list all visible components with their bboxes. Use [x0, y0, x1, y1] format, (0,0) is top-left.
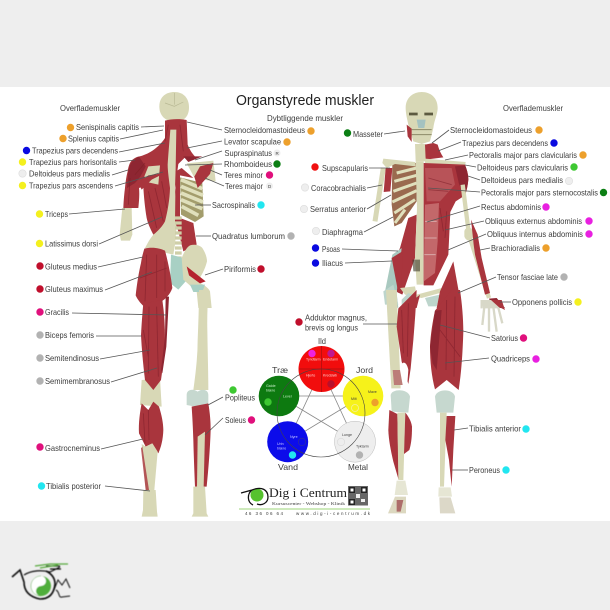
chart: five elements diagram — [259, 336, 383, 472]
element: Træ circle: blære — [266, 388, 275, 392]
label: Diaphragma: Diaphragma — [322, 227, 363, 237]
label: Masseter — [344, 129, 405, 139]
label: Soleus — [205, 415, 255, 435]
label: Triceps — [36, 209, 125, 219]
label: Trapezius pars ascendens — [19, 172, 163, 191]
panel: poster — [0, 87, 610, 521]
element: Metal circle — [334, 421, 376, 462]
element: Metal circle: Lunge — [342, 433, 352, 437]
element: Jord circle — [343, 376, 383, 416]
label: Sternocleidomastoideus back: Sternocleidomastoideus — [224, 125, 305, 135]
label: Gluteus maximus: Gluteus maximus — [45, 284, 103, 294]
label: Pectoralis major pars sternocostalis — [428, 188, 607, 198]
star lines — [279, 369, 363, 442]
label: Supscapularis: Supscapularis — [322, 163, 368, 173]
element: Metal circle: Tyktarm — [356, 444, 369, 448]
label: Semimembranosus — [36, 368, 157, 386]
label: Peroneus: Peroneus — [469, 465, 500, 475]
element: Vand circle: blære — [277, 446, 286, 450]
label: Tibialis posterior: Tibialis posterior — [46, 481, 101, 491]
subtitle: deep muscles: Dybtliggende muskler — [267, 113, 343, 123]
label: Quadriceps: Quadriceps — [491, 354, 530, 364]
logo phone: 46 36 06 64 — [245, 511, 283, 516]
label: Obliquus externus abdominis: Obliquus externus abdominis — [485, 216, 582, 226]
label: Masseter: Masseter — [353, 129, 383, 139]
logo website: www.dig-i-centrum.dk — [296, 511, 371, 516]
label: Rectus abdominis — [427, 202, 550, 222]
element: Træ circle — [259, 376, 299, 416]
label: Satorius — [440, 325, 527, 343]
label: Metal: Metal — [348, 462, 368, 472]
heading: surface muscles right: Overflademuskler — [503, 103, 563, 113]
label: Sternocleidomastoideus front: Sternocleidomastoideus — [450, 125, 532, 135]
element: Træ circle: Lever — [283, 394, 293, 398]
figure: back view legs — [139, 290, 211, 517]
figure: front view upper body — [375, 92, 505, 308]
label: Latissimus dorsi — [36, 217, 162, 249]
label: Tensor fasciae late: Tensor fasciae late — [497, 272, 558, 282]
label: Trapezius pars decendens: Trapezius pars decendens — [32, 146, 118, 156]
element: Ild circle: Kredsløb — [323, 374, 337, 378]
label: Biceps femoris — [36, 330, 142, 340]
label: Adduktor magnus: brevis og longus — [305, 322, 358, 332]
label: Peroneus — [452, 465, 510, 475]
label: Obliquus externus abdominis — [445, 216, 593, 230]
logo: Dig i Centrum — [239, 485, 371, 516]
label: Supraspinatus: Supraspinatus — [224, 148, 272, 158]
label: Teres major: D — [268, 184, 272, 189]
logo name: Dig i Centrum — [269, 485, 347, 500]
label: Senispinalis capitis: Senispinalis capitis — [76, 122, 139, 132]
label: Deltoideus pars medialis front: Deltoideus pars medialis — [481, 175, 563, 185]
label: Gluteus medius — [36, 257, 143, 272]
label: Splenius capitis — [59, 130, 163, 144]
label: Obliquus internus abdominis — [448, 229, 593, 250]
label: Teres major — [205, 178, 273, 191]
label: Levator scapulae: Levator scapulae — [224, 136, 281, 146]
label: Soleus: Soleus — [225, 415, 246, 425]
label: Trapezius pars decendens front: Trapezius pars decendens — [462, 138, 548, 148]
label: Adduktor magnus — [295, 312, 397, 332]
label: Trapezius pars decendens — [23, 143, 165, 156]
element: Træ circle: Galde — [266, 384, 276, 388]
element: Vand circle — [267, 421, 308, 462]
label: Gracilis: Gracilis — [45, 307, 69, 317]
label: Quadriceps — [445, 354, 540, 364]
label: Træ: Træ — [272, 365, 288, 375]
label: Sternocleidomastoideus front — [432, 125, 543, 143]
label: Rhomboideus: Rhomboideus — [224, 159, 272, 169]
element: Vand circle: Urin — [277, 442, 284, 446]
label: Psoas — [312, 244, 398, 254]
icon: QR code — [348, 486, 368, 506]
label: Adduktor magnus: Adduktor magnus, — [305, 312, 367, 322]
label: Serratus anterior — [300, 195, 391, 214]
element: Ild circle: Endetarm — [323, 358, 338, 362]
label: Iliacus — [312, 258, 392, 268]
label: Iliacus: Iliacus — [322, 258, 343, 268]
label: Rectus abdominis: Rectus abdominis — [481, 202, 541, 212]
label: Pectoralis major pars clavicularis: Pectoralis major pars clavicularis — [469, 150, 577, 160]
label: Semimembranosus: Semimembranosus — [45, 376, 110, 386]
label: Sternocleidomastoideus back — [187, 122, 315, 135]
label: Tibialis anterior: Tibialis anterior — [469, 424, 521, 434]
label: Diaphragma — [312, 217, 393, 237]
label: Deltoideus pars clavicularis: Deltoideus pars clavicularis — [477, 162, 568, 172]
label: Trapezius pars ascendens: Trapezius pars ascendens — [29, 181, 113, 191]
element: Ild circle — [298, 346, 344, 392]
label: Piriformis: Piriformis — [224, 264, 256, 274]
label: Supraspinatus: R — [276, 151, 280, 156]
logo tagline: Kursuscenter - Webshop - Klinik — [272, 501, 346, 506]
element: Vand circle: Nyre — [290, 435, 298, 439]
logo: yin yang dragon — [12, 564, 70, 599]
label: Quadratus lumborum: Quadratus lumborum — [212, 231, 285, 241]
label: Vand: Vand — [278, 462, 298, 472]
label: Gastrocneminus — [36, 439, 143, 453]
label: Deltoideus pars medialis: Deltoideus pars medialis — [29, 169, 110, 179]
label: Tensor fasciae late — [458, 272, 568, 293]
label: Gluteus maximus — [36, 272, 152, 294]
label: Teres minor: Teres minor — [224, 170, 263, 180]
label: Triceps: Triceps — [45, 209, 68, 219]
label: Trapezius pars decendens front — [438, 138, 558, 151]
element: Ild circle: Hjerte — [306, 374, 315, 378]
label: Latissimus dorsi: Latissimus dorsi — [45, 239, 98, 249]
label: Psoas: Psoas — [322, 244, 340, 254]
label: Levator scapulae — [187, 136, 291, 148]
label: Pectoralis major pars sternocostalis: Pectoralis major pars sternocostalis — [481, 188, 598, 198]
label: Supscapularis — [311, 163, 390, 173]
label: Jord: Jord — [356, 365, 373, 375]
label: Biceps femoris: Biceps femoris — [45, 330, 94, 340]
label: Gracilis — [36, 307, 167, 317]
figure: back view upper body — [120, 92, 216, 308]
label: Satorius: Satorius — [491, 333, 518, 343]
label: Splenius capitis: Splenius capitis — [68, 134, 119, 144]
label: Popliteus — [208, 386, 255, 405]
label: Piriformis — [205, 264, 265, 275]
cycle ring — [277, 369, 365, 457]
label: Sacrospinalis: Sacrospinalis — [212, 200, 255, 210]
label: Rhomboideus — [185, 159, 281, 169]
label: Supraspinatus — [195, 148, 280, 160]
label: Coracobrachialis: Coracobrachialis — [311, 183, 366, 193]
label: Tibialis posterior — [38, 481, 150, 491]
label: Popliteus: Popliteus — [225, 392, 255, 402]
title: Organstyrede muskler — [236, 92, 374, 109]
element: Jord circle: Mave — [368, 390, 377, 394]
label: Gluteus medius: Gluteus medius — [45, 262, 97, 272]
label: Semitendinosus — [36, 350, 150, 363]
label: Semitendinosus: Semitendinosus — [45, 353, 99, 363]
label: Brachioradialis: Brachioradialis — [491, 243, 540, 253]
label: Obliquus internus abdominis: Obliquus internus abdominis — [487, 229, 583, 239]
element: Ild circle: Tyndtarm — [306, 358, 321, 362]
heading: surface muscles left: Overflademuskler — [60, 103, 120, 113]
label: Serratus anterior: Serratus anterior — [310, 204, 366, 214]
label: Opponens pollicis: Opponens pollicis — [512, 297, 572, 307]
label: Teres minor — [210, 170, 273, 180]
figure: right hand — [481, 300, 505, 332]
label: Gastrocneminus: Gastrocneminus — [45, 443, 100, 453]
label: Teres major: Teres major — [225, 181, 263, 191]
element: Jord circle: Milt — [351, 397, 357, 401]
figure: front view legs — [386, 290, 463, 513]
label: Trapezius pars horisontalis: Trapezius pars horisontalis — [29, 157, 117, 167]
label: Ild: Ild — [318, 336, 326, 346]
icon: logo dragon — [241, 488, 268, 505]
